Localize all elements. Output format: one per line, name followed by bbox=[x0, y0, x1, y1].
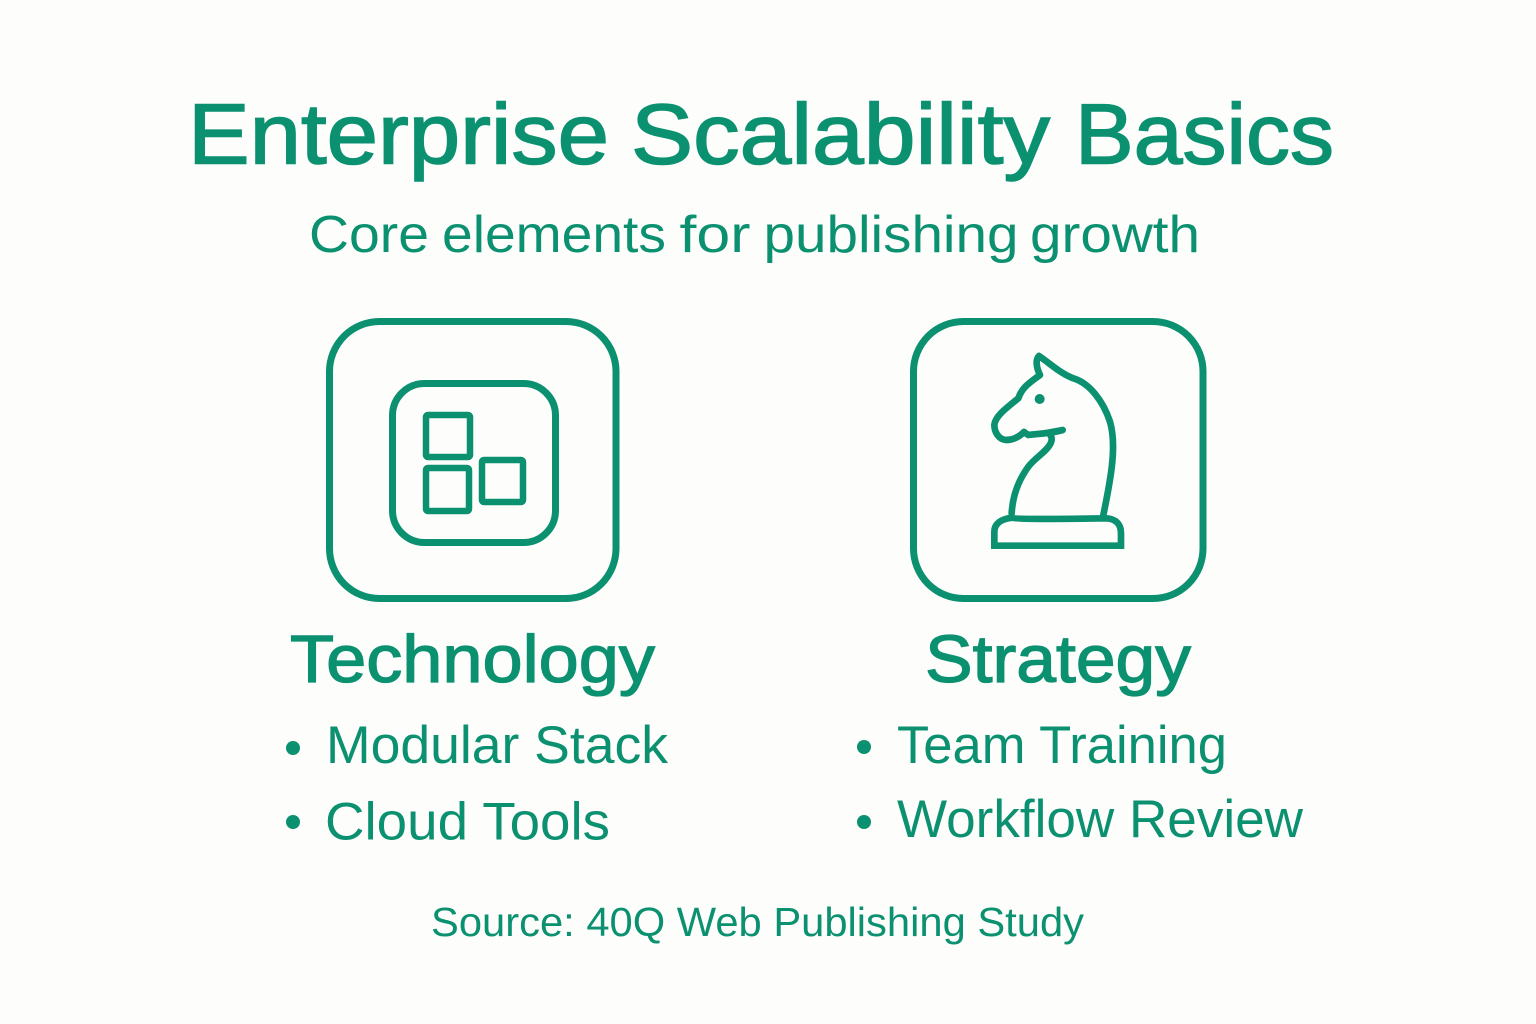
source note: Source: 40Q Web Publishing Study bbox=[431, 899, 1085, 945]
subtitle bbox=[309, 206, 1200, 264]
title: Enterprise bbox=[188, 88, 609, 182]
list: technology items: Modular Stack bbox=[326, 716, 668, 775]
subtitle: growth bbox=[1030, 206, 1200, 264]
subtitle: elements bbox=[442, 206, 666, 264]
title bbox=[188, 88, 1334, 182]
subtitle: publishing bbox=[764, 206, 1018, 264]
heading: technology: Technology bbox=[290, 622, 656, 697]
title: Scalability bbox=[631, 88, 1051, 182]
subtitle: Core bbox=[309, 206, 429, 264]
list: technology items bbox=[286, 716, 668, 852]
list: strategy items: Workflow Review bbox=[897, 790, 1304, 849]
list: strategy items bbox=[857, 716, 1304, 849]
heading: strategy: Strategy bbox=[925, 622, 1192, 697]
title: Basics bbox=[1075, 88, 1334, 182]
list: technology items: Cloud Tools bbox=[325, 792, 610, 852]
subtitle: for bbox=[680, 206, 750, 264]
panel: technology bbox=[286, 322, 668, 852]
list: strategy items: Team Training bbox=[897, 716, 1227, 775]
icon: modular blocks bbox=[330, 322, 616, 598]
panel: strategy bbox=[857, 322, 1304, 849]
icon: chess knight bbox=[914, 322, 1203, 598]
